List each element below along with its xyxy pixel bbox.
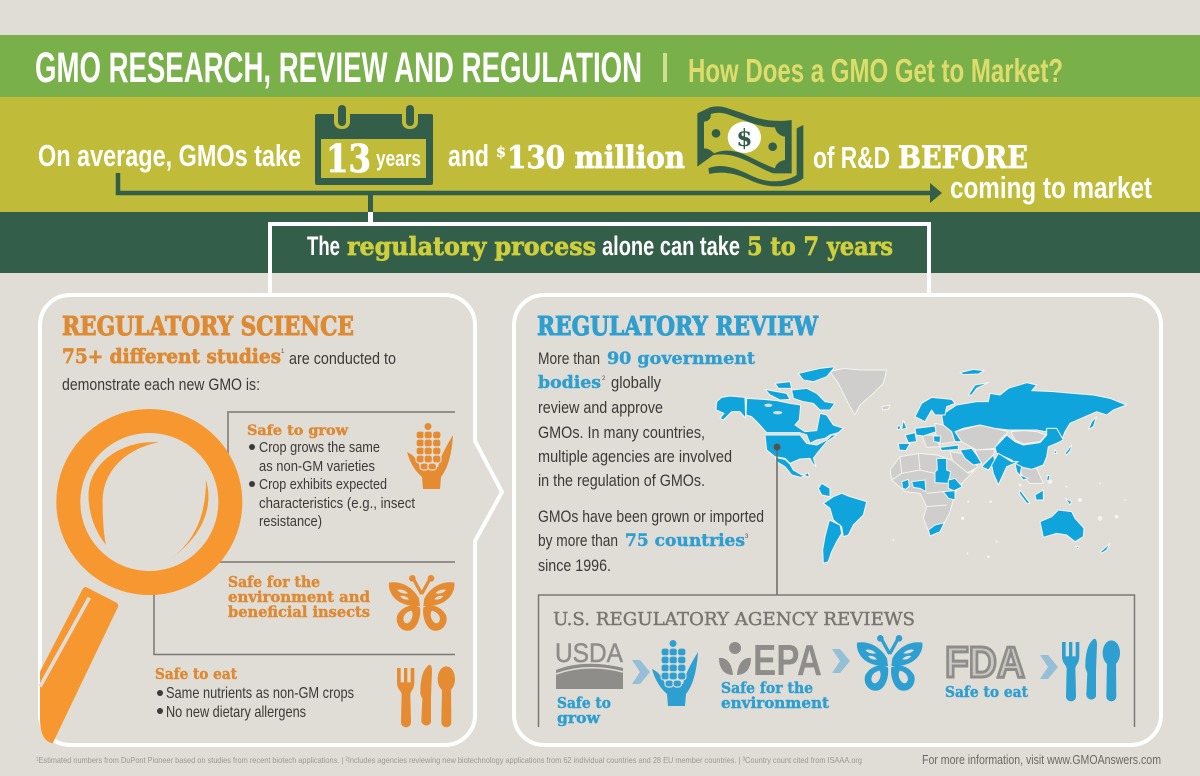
block: safe for the environment (228, 573, 371, 621)
text: 75 countries: GMOs have been grown or imported (538, 507, 764, 526)
header band: title (0, 35, 1200, 97)
block: safe to eat: No new dietary allergens (166, 704, 306, 721)
text: government bodies: 2 (602, 376, 606, 382)
block: safe to grow: Crop grows the same (259, 439, 380, 456)
block: safe to eat (155, 665, 354, 721)
text: 130 million (448, 138, 685, 176)
heading: regulatory review: REGULATORY REVIEW (537, 312, 819, 342)
text: studies intro: demonstrate each new GMO is: (62, 375, 260, 394)
text: 75 countries: since 1996. (538, 556, 611, 575)
subtitle: How Does a GMO Get to Market? (688, 52, 1063, 89)
block: safe to grow: Crop exhibits expected (259, 476, 387, 493)
logo: USDA (555, 638, 623, 689)
text: government bodies: 90 government (607, 349, 755, 369)
text: studies intro (62, 344, 396, 394)
arrow: timeline (118, 173, 942, 212)
logo: USDA: USDA (555, 638, 623, 668)
text: 75 countries: 3 (745, 534, 749, 540)
text: safe to grow (557, 694, 611, 727)
logo: FDA: FDA (945, 638, 1025, 687)
text: 130 million: 130 million (507, 140, 685, 176)
icon: orange corn (407, 423, 453, 489)
text: safe to grow: Safe to (557, 694, 611, 712)
text: government bodies: multiple agencies are involved (538, 447, 732, 466)
text: safe for the environment: environment (721, 694, 829, 712)
subtitle (663, 52, 1063, 89)
block: safe to grow: as non-GM varieties (259, 458, 375, 475)
heading: regulatory science: REGULATORY SCIENCE (62, 312, 354, 342)
connector lines (154, 412, 455, 654)
icon: banknote: $ (736, 124, 752, 152)
yellow band: time and cost (0, 97, 1200, 212)
block: safe to eat: Safe to eat (155, 665, 237, 683)
icon: blue corn (652, 640, 698, 706)
panel: us agency reviews (538, 595, 1134, 727)
block: safe for the environment: environment and (228, 588, 371, 606)
world map (716, 367, 1127, 563)
text: safe to grow: grow (557, 709, 601, 727)
text: safe to eat: Safe to eat (945, 683, 1028, 701)
text: regulatory process: alone can take (602, 231, 740, 261)
icon: orange butterfly (389, 575, 454, 631)
icon: orange cutlery (397, 665, 455, 727)
text: government bodies: globally (611, 373, 661, 392)
eurasia (897, 369, 1127, 505)
panel: regulatory science (40, 295, 502, 745)
text: of R and D before: of R&D (813, 140, 890, 175)
text: government bodies: bodies (538, 373, 601, 393)
text: government bodies: More than (538, 349, 600, 368)
africa and oceania (890, 453, 1126, 558)
text: regulatory process (307, 231, 893, 261)
block: safe to eat: Same nutrients as non-GM crops (166, 685, 354, 702)
text: of R and D before: BEFORE (898, 140, 1028, 176)
block: safe to grow (247, 423, 416, 530)
block: safe to grow: Safe to grow (247, 423, 349, 439)
text: on average: On average, GMOs take (38, 138, 301, 173)
icon: calendar 13 years (315, 105, 433, 185)
icon: calendar 13 years: 13 (326, 136, 371, 181)
text: regulatory process: 5 to 7 years (747, 232, 893, 261)
americas (716, 367, 890, 563)
block: safe to grow: resistance) (259, 513, 322, 530)
text: regulatory process: regulatory process (347, 232, 596, 261)
text: 75 countries: by more than (538, 531, 618, 550)
text: 75 countries: 75 countries (625, 531, 745, 551)
logo: EPA (719, 636, 822, 685)
block: safe to grow: characteristics (e.g., insect (259, 495, 416, 512)
text: studies intro: 75+ different studies (62, 344, 281, 368)
text: regulatory process: The (307, 231, 340, 261)
icon: magnifying glass (40, 409, 242, 743)
map pin and connector (774, 444, 780, 595)
arrow: FDA to cutlery (1040, 655, 1058, 679)
footnotes: ¹Estimated numbers from DuPont Pioneer based on studies from recent biotech applications. | ²Includes agencies reviewing new biotechnology applications from 62 individual countries and 28 EU member countries. | ³Country count cited from ISAAA.org (36, 755, 862, 765)
panel: regulatory review (514, 295, 1161, 745)
block: safe for the environment: Safe for the (228, 573, 320, 591)
text: government bodies: GMOs. In many countries, (538, 423, 705, 442)
text: safe for the environment: Safe for the (721, 679, 813, 697)
icon: blue cutlery (1062, 639, 1120, 701)
arrow: USDA to corn (632, 660, 650, 684)
icon: calendar 13 years: years (376, 146, 421, 171)
text: government bodies (538, 349, 755, 490)
arrow: EPA to butterfly (832, 649, 850, 673)
text: studies intro: are conducted to (289, 349, 396, 368)
icon: banknote (697, 106, 803, 186)
heading: agency reviews: U.S. REGULATORY AGENCY REVIEWS (553, 609, 915, 630)
text: studies intro: 1 (281, 349, 285, 355)
text: 130 million: $ (496, 143, 506, 161)
title: GMO RESEARCH, REVIEW AND REGULATION (35, 44, 642, 92)
text: government bodies: in the regulation of GMOs. (538, 471, 705, 490)
text: 75 countries (538, 507, 764, 575)
dark band: regulatory process (0, 212, 1200, 295)
block: safe for the environment: beneficial insects (228, 603, 370, 621)
text: of R and D before (813, 140, 1028, 176)
icon: blue butterfly (857, 635, 922, 691)
text: safe for the environment (721, 679, 829, 712)
text: government bodies: review and approve (538, 398, 663, 417)
logo: EPA: EPA (753, 636, 822, 685)
text: 130 million: and (448, 138, 489, 173)
